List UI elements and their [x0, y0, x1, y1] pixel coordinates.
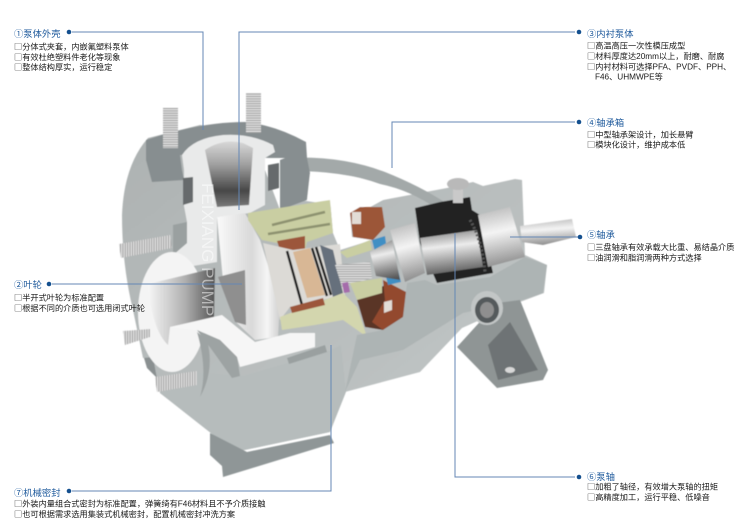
- front bore: [148, 268, 215, 345]
- casing inner pocket: [173, 222, 187, 255]
- callout 1: pump casing: □分体式夹套，内嵌氟塑料泵体: [14, 40, 129, 52]
- white lining top: [173, 135, 275, 268]
- callout 7: mechanical seal: □也可根据需求选用集装式机械密封，配置机械密封冲洗方案: [14, 508, 235, 520]
- callout 6: shaft: □高精度加工，运行平稳、低噪音: [587, 491, 710, 503]
- lower casing inner face: [197, 330, 240, 378]
- front bore ring: [138, 252, 206, 372]
- upper brown cover: [350, 207, 385, 240]
- pump inlet bore: [205, 142, 253, 207]
- blue-grey ring: [320, 245, 343, 297]
- dark rear cavity: [357, 285, 408, 330]
- purple seal detail: [342, 282, 350, 293]
- stud bolts: [119, 93, 261, 392]
- callout 5: bearing: ⑤轴承: [587, 227, 615, 241]
- leader line: pump casing: [72, 32, 203, 130]
- callout 7: mechanical seal: ⑦机械密封: [14, 485, 60, 499]
- leader line: shaft: [455, 233, 575, 477]
- lower casing: [160, 345, 346, 452]
- callout 3: lining: □内衬材料可选择PFA、PVDF、PPH、: [587, 60, 731, 72]
- callout 2: impeller: □根据不同的介质也可选用闭式叶轮: [14, 302, 145, 314]
- tan ring: [293, 248, 325, 298]
- casing slots: [183, 163, 279, 205]
- bearing shaft step: [370, 240, 400, 280]
- lower housing: [345, 257, 547, 392]
- callout 3: lining: F46、UHMWPE等: [595, 72, 663, 82]
- pump casing back body: [122, 125, 547, 452]
- callout 1: pump casing: ①泵体外壳: [14, 26, 60, 40]
- rear seal olive upper: [340, 240, 372, 258]
- callout 3: lining: □高温高压一次性模压成型: [587, 40, 685, 52]
- lower seal brown ring: [290, 298, 325, 313]
- impeller inner shadow: [218, 270, 246, 325]
- callout 2: impeller: ②叶轮: [14, 277, 42, 291]
- leader line: impeller: [52, 283, 242, 285]
- dark seal rings: [287, 247, 331, 305]
- callout 4: bearing housing: □中型轴承架设计，加长悬臂: [587, 128, 693, 140]
- top flange section: [146, 122, 310, 210]
- callout 3: lining: [577, 26, 731, 82]
- output shaft: [520, 219, 576, 245]
- callout 6: shaft: [577, 469, 718, 503]
- callout 1: pump casing: □整体结构厚实，运行稳定: [14, 61, 112, 73]
- lower white lining: [170, 315, 315, 367]
- callout 1: pump casing: [14, 26, 129, 73]
- lower mechanical seal: [280, 293, 367, 337]
- small cover bolts: [352, 212, 392, 313]
- bearing housing black cavity: [415, 197, 493, 283]
- housing connecting rib: [285, 158, 446, 209]
- blue seal parts: [372, 236, 401, 285]
- casing left foot: [144, 357, 157, 378]
- callout 2: impeller: [14, 277, 145, 314]
- callout 4: bearing housing: [577, 115, 693, 150]
- top oil plug: [447, 178, 469, 203]
- leader line: bearing: [510, 236, 578, 238]
- leader line: bearing housing: [392, 122, 575, 168]
- main shaft: [420, 230, 483, 275]
- seal grooves: [268, 212, 330, 234]
- callout 7: mechanical seal: [14, 485, 266, 520]
- callout 7: mechanical seal: □外装内量组合式密封为标准配置，弹簧绮有F46材料且不予介质接触: [14, 498, 266, 510]
- bearing ring left: [390, 223, 425, 282]
- casing bottom foot: [210, 433, 334, 477]
- bearing foot: [457, 300, 548, 388]
- casing rib arc: [197, 332, 210, 397]
- seal brown ring: [277, 236, 305, 250]
- callout 5: bearing: [578, 227, 734, 264]
- callout 1: pump casing: □有效杜绝塑料件老化等现象: [14, 51, 120, 63]
- callout 6: shaft: □加粗了轴径，有效增大泵轴的扭矩: [587, 480, 718, 492]
- callout 4: bearing housing: ④轴承箱: [587, 115, 624, 129]
- impeller: [217, 213, 280, 340]
- callout 3: lining: □材料厚度达20mm以上，耐磨、耐腐: [587, 50, 724, 62]
- callout 5: bearing: □油润滑和脂润滑两种方式选择: [587, 252, 702, 264]
- callout 2: impeller: □半开式叶轮为标准配置: [14, 292, 104, 304]
- callout 4: bearing housing: □模块化设计，维护成本低: [587, 138, 685, 150]
- callout 3: lining: ③内衬泵体: [587, 26, 634, 40]
- rear seal olive lower: [350, 278, 382, 300]
- leader line: seal: [72, 345, 331, 491]
- callout 5: bearing: □三盘轴承有效承载大比重、易结晶介质: [587, 241, 734, 253]
- leader line: lining: [239, 32, 575, 210]
- casing slot: [287, 345, 327, 364]
- white gap under rib: [307, 174, 398, 250]
- lower brown cover: [372, 280, 408, 330]
- bearing balls: [470, 220, 485, 272]
- upper mechanical seal: [248, 200, 333, 250]
- shaft sleeve: [263, 243, 345, 320]
- side drain plug: [471, 291, 503, 325]
- threaded spring: [335, 262, 372, 287]
- watermark: FEIXIANG PUMP: [198, 183, 217, 316]
- callout 6: shaft: ⑥泵轴: [587, 469, 615, 483]
- output bearing ring: [478, 207, 525, 267]
- pump cutaway illustration: [119, 93, 576, 477]
